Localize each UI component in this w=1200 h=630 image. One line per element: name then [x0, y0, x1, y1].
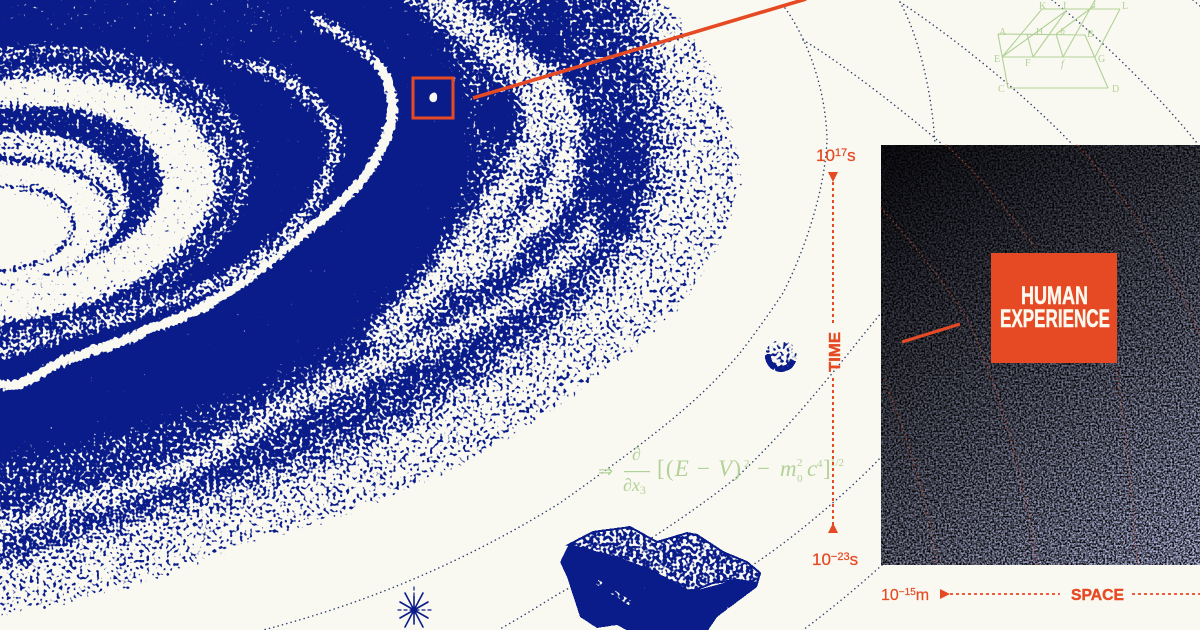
time axis [812, 146, 858, 569]
green formula: ] [823, 456, 831, 481]
galaxy: dark ring [0, 85, 175, 305]
galaxy: solid inner disc [0, 0, 470, 460]
galaxy: bright thin arm [0, 60, 392, 385]
space axis [881, 587, 1200, 604]
rock: light streak [597, 582, 630, 603]
dark panel: human scale field [881, 145, 1200, 565]
icon: star [398, 587, 431, 627]
green geometric diagram: f [1061, 59, 1065, 70]
galaxy: dark stripe [0, 27, 257, 363]
green geometric diagram: F [1025, 58, 1031, 69]
red line in panel [902, 324, 960, 342]
callout: highlight square on galaxy [413, 78, 453, 118]
arrow: red line from galaxy to top [473, 0, 806, 98]
time axis dashes [832, 182, 834, 525]
time axis bottom marker [828, 523, 838, 533]
label text [1000, 282, 1110, 333]
green geometric diagram: E [994, 54, 1000, 65]
green geometric diagram: K [1039, 1, 1047, 12]
time axis top label: 10 [816, 146, 835, 165]
green formula: ∂ [632, 444, 641, 464]
galaxy: core [0, 198, 58, 260]
galaxy: upper right light band B [470, 60, 569, 275]
time axis bottom label: −23 [831, 551, 850, 563]
green geometric diagram: H [1036, 27, 1043, 38]
green formula: [(E − V) [657, 456, 741, 481]
time axis bottom label: 10 [812, 550, 831, 569]
green formula: m [780, 456, 797, 481]
green geometric diagram [994, 0, 1128, 95]
galaxy: upper right light band A [385, 0, 540, 335]
green formula: 1/2 [830, 457, 844, 469]
green formula [598, 444, 844, 497]
galaxy: top dark with specks [0, 0, 320, 60]
green formula: 2 [744, 458, 750, 470]
green formula: − [757, 456, 770, 481]
galaxy: faded top of arm [290, 10, 375, 60]
galaxy: mottled inner disc [0, 8, 277, 376]
space axis dashes [950, 593, 1200, 595]
label text: HUMAN [1021, 282, 1088, 310]
galaxy: big pale ring [0, 48, 234, 354]
galaxy: inner stripes [0, 159, 112, 255]
green formula: 3 [640, 483, 646, 497]
time axis bottom label: s [850, 550, 858, 569]
galaxy: outer mottled band [0, 190, 612, 535]
space axis left label: −15 [899, 587, 916, 598]
green formula: 2 [797, 457, 802, 469]
green formula: c [807, 456, 817, 481]
space axis left label: m [916, 587, 929, 604]
red dotted lines in panel [881, 145, 1200, 565]
green geometric diagram: h [1060, 27, 1065, 38]
green geometric diagram: L [1122, 1, 1128, 12]
green geometric diagram: C [998, 84, 1005, 95]
globe [764, 339, 798, 373]
green geometric diagram: B [1087, 29, 1094, 40]
green formula: ∂x [623, 475, 640, 495]
time axis top label: 17 [835, 147, 847, 159]
dotted orbit lines [263, 0, 1200, 630]
green formula: 4 [817, 458, 823, 470]
time axis top label: s [847, 146, 856, 165]
time axis title: TIME [827, 332, 844, 372]
galaxy: outer haze [0, 0, 743, 625]
galaxy: inner pale ring [0, 119, 135, 297]
galaxy: body [0, 0, 660, 575]
rock: dark underside [560, 546, 761, 630]
galaxy: mottled inner arm [0, 55, 335, 356]
green formula: 0 [797, 473, 803, 485]
green geometric diagram: A [999, 27, 1007, 38]
label text: EXPERIENCE [1000, 305, 1110, 333]
space axis left label: 10 [881, 587, 899, 604]
space axis title: SPACE [1071, 587, 1124, 604]
green geometric diagram: I [1063, 1, 1066, 12]
galaxy: dark knots right [593, 120, 637, 240]
space axis marker [940, 589, 950, 599]
label box [991, 253, 1117, 363]
green geometric diagram: D [1112, 84, 1119, 95]
green geometric diagram: i [1093, 0, 1096, 11]
rock: lit top [568, 527, 760, 592]
green formula: ⇒ [598, 461, 613, 481]
green geometric diagram: G [1098, 54, 1105, 65]
time axis top marker [828, 172, 838, 182]
